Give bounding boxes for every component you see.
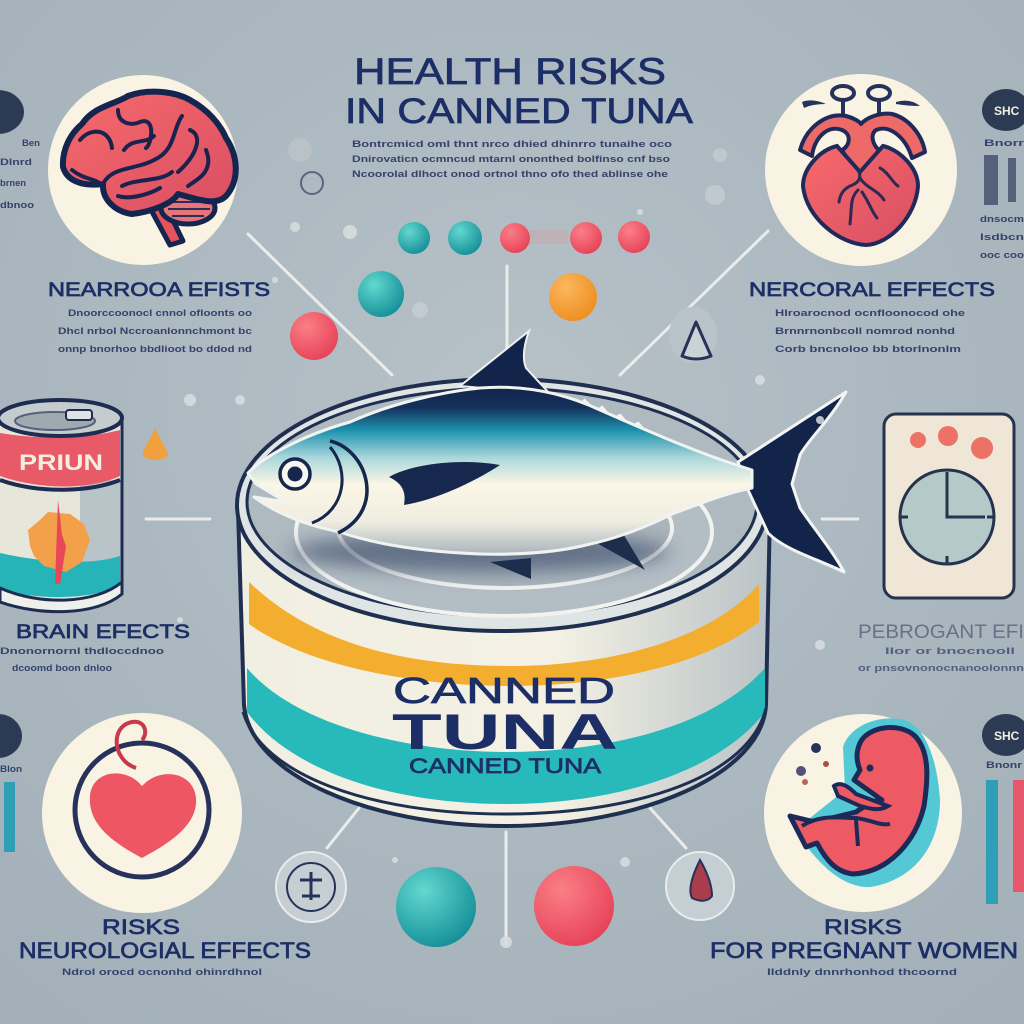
body text: Hlroarocnod ocnfloonocod ohe <box>775 308 965 318</box>
small icon: droplet <box>666 852 734 920</box>
body text: Ndrol orocd ocnonhd ohinrdhnol <box>62 967 262 977</box>
body text: Brnnrnonbcoll nomrod nonhd <box>775 326 955 336</box>
bottom right edge tab: Bnonr <box>986 760 1023 770</box>
can: left: PRIUN <box>19 450 103 475</box>
scattered specks <box>177 138 825 948</box>
can label: CANNED <box>393 670 615 711</box>
right edge tab: SHC <box>994 104 1020 118</box>
small drop icon <box>669 307 717 363</box>
body text: Dhcl nrbol Nccroanlonnchmont bc <box>58 326 252 336</box>
left edge tab: Ben <box>22 138 40 148</box>
icon: heart <box>765 74 957 266</box>
body text: dcoomd boon dnloo <box>12 663 113 673</box>
body text: or pnsovnonocnanoolonnn <box>858 663 1024 673</box>
body text: Dnonornornl thdloccdnoo <box>0 646 165 656</box>
panel: heart <box>749 74 995 354</box>
body text: Ilor or bnocnooll <box>885 646 1015 656</box>
icon: heart <box>42 713 242 913</box>
bottom spheres <box>396 866 614 947</box>
small icon: gauge <box>276 852 346 922</box>
right edge tab: lsdbcn <box>980 232 1024 242</box>
pectoral fin <box>389 462 500 505</box>
can label <box>392 670 618 778</box>
eye <box>280 459 310 489</box>
heading: brain effects left: BRAIN EFECTS <box>16 622 190 643</box>
head <box>330 441 367 533</box>
bottom right edge tab <box>982 714 1024 904</box>
title body text: Ncoorolal dlhoct onod ortnol thno ofo thed ablinse ohe <box>352 169 668 179</box>
fish shadow <box>290 532 670 572</box>
can: left <box>0 400 122 612</box>
right edge tab: Bnorr <box>984 138 1024 148</box>
title: IN CANNED TUNA <box>345 92 694 131</box>
body <box>248 387 752 554</box>
title body text: Dnirovaticn ocmncud mtarnl ononthed bolfinso cnf bso <box>352 154 671 164</box>
can body <box>238 510 770 826</box>
fish <box>248 331 846 579</box>
panel: pregnant women <box>710 714 1018 977</box>
heading: risks: RISKS <box>824 916 902 939</box>
can rim <box>237 379 767 631</box>
connector lines <box>146 231 858 944</box>
panel: brain <box>48 75 270 354</box>
can label: CANNED TUNA <box>409 755 601 778</box>
heading: cardiac effects: NERCORAL EFFECTS <box>749 280 995 301</box>
heading: pregnant effects: PEBROGANT EFI <box>858 622 1024 643</box>
heading: for pregnant women: FOR PREGNANT WOMEN <box>710 938 1018 963</box>
icon: orange drop <box>143 428 168 460</box>
body text: Dnoorccoonocl cnnol ofloonts oo <box>68 308 253 318</box>
main tuna can <box>237 379 770 826</box>
body text: onnp bnorhoo bbdlioot bo ddod nd <box>58 344 252 354</box>
body text: Ilddnly dnnrhonhod thcoornd <box>767 967 957 977</box>
heading: brain effects: NEARROOA EFISTS <box>48 280 270 301</box>
small molecules row <box>290 221 650 360</box>
icon: fetus <box>764 714 962 912</box>
right edge tab <box>980 89 1024 260</box>
panel: neurological risks <box>19 713 311 977</box>
body text <box>58 308 253 354</box>
orange band <box>249 582 759 686</box>
dorsal fin <box>460 331 550 394</box>
title body text: Bontrcmicd oml thnt nrco dhied dhinrro tunaihe oco <box>352 139 673 149</box>
left edge tab: brnen <box>0 178 26 188</box>
right edge tab: ooc coo <box>980 250 1024 260</box>
left edge tab: Dlnrd <box>0 157 32 167</box>
clock card <box>884 414 1014 598</box>
left edge tab <box>0 90 40 210</box>
bottom left edge tab <box>0 714 22 852</box>
body text <box>858 646 1024 673</box>
bottom left edge tab: Blon <box>0 764 22 774</box>
ventral fins <box>490 532 645 579</box>
bottom right edge tab: SHC <box>994 729 1020 743</box>
finlets <box>583 400 716 464</box>
can label: TUNA <box>392 704 618 760</box>
tail <box>738 392 846 572</box>
right edge tab: dnsocm <box>980 214 1024 224</box>
body text: Corb bncnoloo bb btorlnonlm <box>775 344 961 354</box>
body text <box>0 646 165 673</box>
icon: brain <box>48 75 238 265</box>
title <box>345 51 694 131</box>
left edge tab: dbnoo <box>0 200 35 210</box>
title: HEALTH RISKS <box>354 51 666 92</box>
body text <box>775 308 965 354</box>
heading: neurological effects: NEUROLOGIAL EFFECTS <box>19 938 311 963</box>
teal band <box>247 668 765 804</box>
heading: risks: RISKS <box>102 916 180 939</box>
title body text <box>352 139 673 179</box>
